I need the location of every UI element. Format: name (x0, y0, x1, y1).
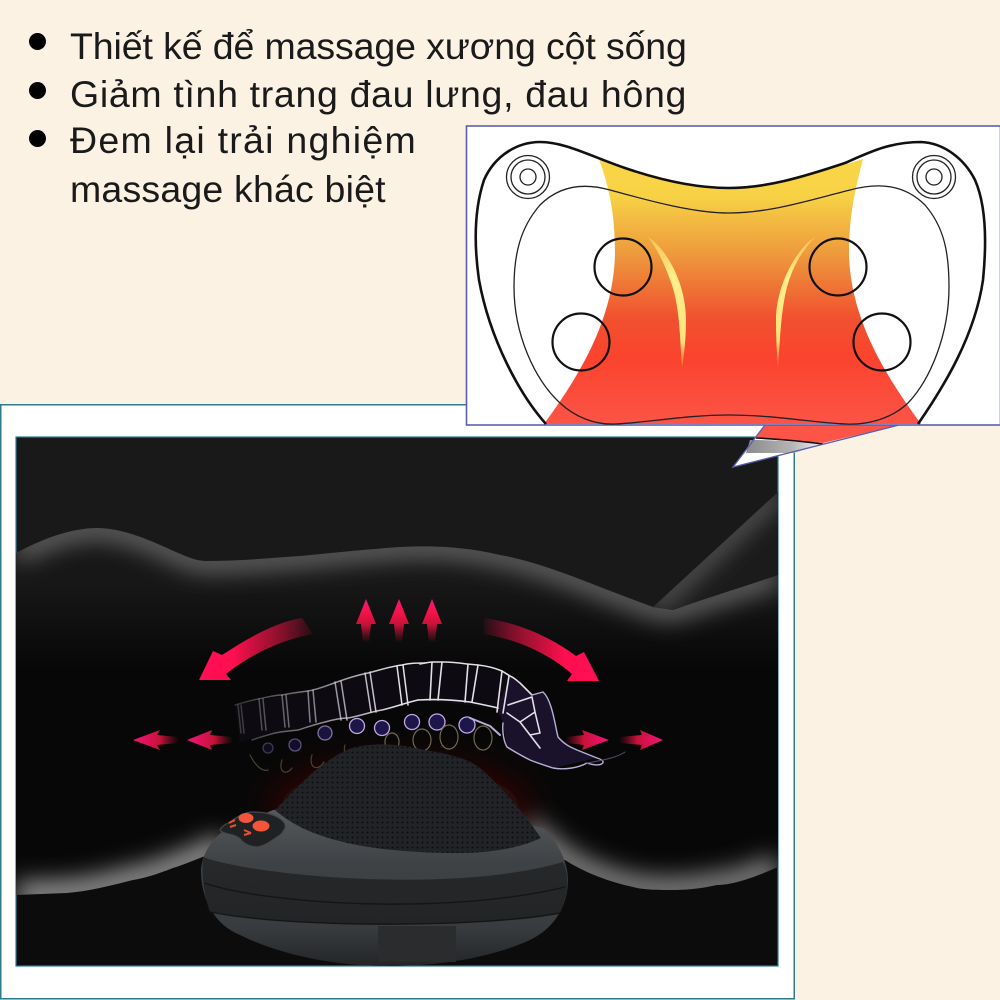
callout box (466, 126, 1000, 425)
bullet 2 (29, 82, 46, 99)
heat zone (544, 159, 921, 424)
bullet 3 (29, 130, 46, 147)
text line 1: Thiết kế để massage xương cột sống (70, 25, 687, 67)
inner outline (514, 186, 949, 424)
vertebra body fill (235, 662, 510, 742)
body silhouette with glowing edge (16, 490, 780, 900)
callout: pillow heat diagram (466, 126, 1000, 467)
arrows: outward horizontal (133, 730, 663, 750)
pillow outline (476, 142, 985, 424)
heat streak left (648, 237, 686, 368)
image frame: white panel with teal border (1, 405, 794, 999)
bullet list (29, 25, 687, 210)
corner rings left (506, 156, 550, 198)
pillow strap (378, 926, 456, 962)
arrow: left curved (199, 618, 313, 680)
spinal processes (263, 714, 475, 753)
control panel (220, 812, 285, 847)
sacrum outer outline (503, 692, 603, 769)
sacrum translucent fill (497, 676, 597, 768)
spinal loops (250, 725, 492, 772)
text line 3: Đem lại trải nghiệm (70, 119, 417, 161)
pillow shell (201, 800, 568, 966)
heat streak right (776, 237, 815, 368)
bullet 1 (29, 33, 46, 50)
massage node circles (552, 238, 910, 370)
pillow mesh top (275, 744, 541, 853)
pillow seams (204, 883, 565, 924)
pillow zip band (202, 857, 567, 924)
callout tail (733, 425, 899, 467)
spine illustration (235, 662, 625, 772)
corner rings right (912, 156, 956, 198)
arrow: right curved (484, 618, 599, 681)
massage pillow (201, 744, 568, 966)
spine outline and vertebrae (235, 663, 425, 740)
heat glow under pillow (275, 768, 525, 852)
text line 4: massage khác biệt (70, 168, 386, 210)
arrows: upward trio (356, 599, 442, 642)
leg wedge (650, 490, 780, 615)
text line 2: Giảm tình trang đau lưng, đau hông (70, 73, 687, 115)
